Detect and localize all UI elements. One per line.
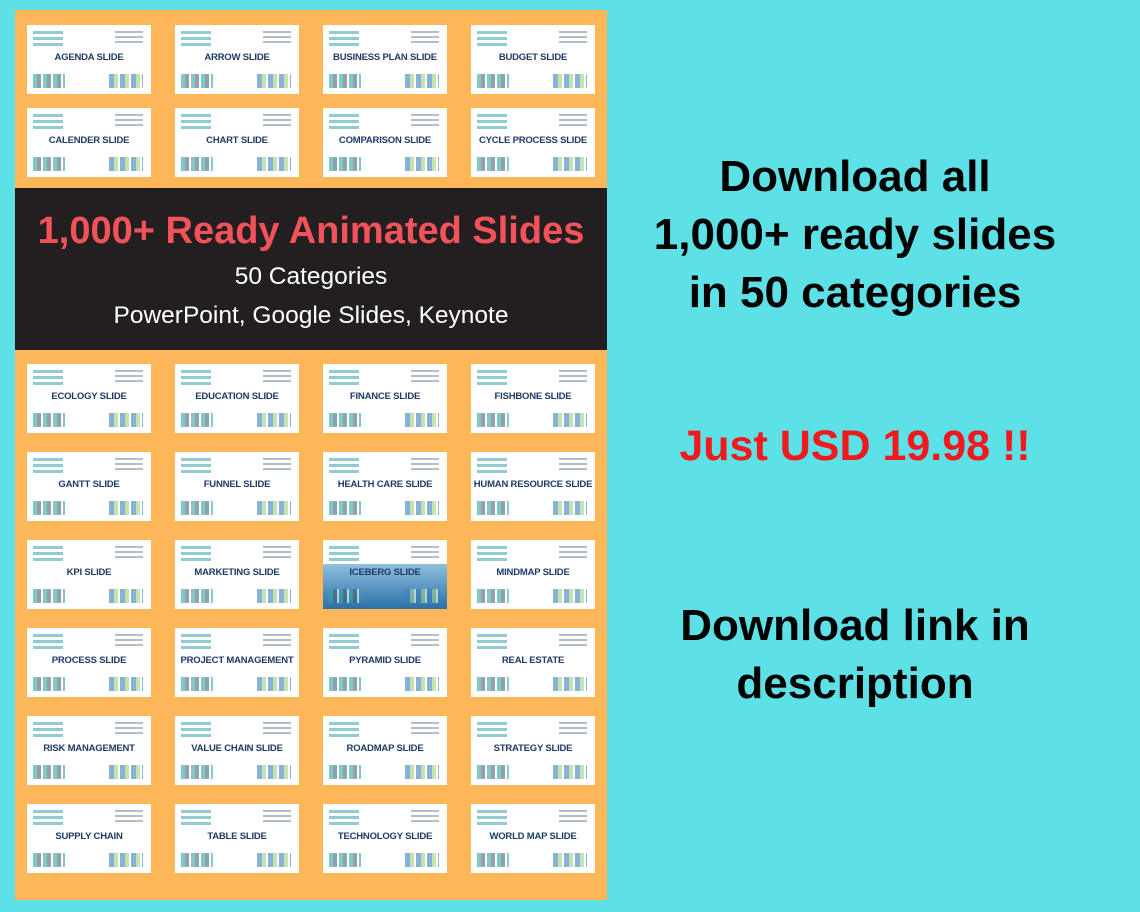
thumbnail: pyramid — [323, 628, 447, 697]
thumbnail: process: PROCESS SLIDE — [52, 655, 126, 666]
thumbnail: iceberg: ICEBERG SLIDE — [349, 567, 421, 578]
thumbnail: calender: CALENDER SLIDE — [49, 135, 129, 146]
thumbnail: calender — [27, 108, 151, 177]
text: download link — [680, 601, 1030, 708]
thumbnail: gantt — [27, 452, 151, 521]
text: price: Just USD 19.98 !! — [679, 422, 1031, 470]
thumbnail: world map: WORLD MAP SLIDE — [489, 831, 577, 842]
thumbnail: risk management — [27, 716, 151, 785]
thumbnail: gantt: GANTT SLIDE — [58, 479, 120, 490]
thumbnail: strategy: STRATEGY SLIDE — [494, 743, 572, 754]
thumbnail: business plan: BUSINESS PLAN SLIDE — [333, 52, 437, 63]
panel: slide catalogue — [15, 10, 607, 900]
thumbnail: arrow — [175, 25, 299, 94]
thumbnail: pyramid: PYRAMID SLIDE — [349, 655, 421, 666]
text: download link: description — [736, 659, 974, 708]
banner subtitle — [114, 263, 508, 329]
thumbnail: marketing — [175, 540, 299, 609]
thumbnail: health care: HEALTH CARE SLIDE — [338, 479, 432, 490]
thumbnail: ecology: ECOLOGY SLIDE — [51, 391, 127, 402]
thumbnail: comparison: COMPARISON SLIDE — [339, 135, 431, 146]
thumbnail: real estate: REAL ESTATE — [502, 655, 564, 666]
banner title: 1,000+ Ready Animated Slides — [38, 210, 584, 252]
thumbnail: human resource: HUMAN RESOURCE SLIDE — [474, 479, 592, 490]
thumbnail: mindmap: MINDMAP SLIDE — [496, 567, 570, 578]
thumbnail: supply chain — [27, 804, 151, 873]
thumbnail: fishbone: FISHBONE SLIDE — [495, 391, 571, 402]
thumbnail: funnel — [175, 452, 299, 521]
thumbnail: education: EDUCATION SLIDE — [195, 391, 279, 402]
thumbnail: chart — [175, 108, 299, 177]
thumbnail: iceberg — [323, 540, 447, 609]
thumbnail: business plan — [323, 25, 447, 94]
thumbnail: health care — [323, 452, 447, 521]
text: download all: in 50 categories — [689, 268, 1021, 317]
thumbnail: project management — [175, 628, 299, 697]
thumbnail: finance: FINANCE SLIDE — [350, 391, 420, 402]
thumbnail: value chain: VALUE CHAIN SLIDE — [191, 743, 283, 754]
thumbnail: risk management: RISK MANAGEMENT — [43, 743, 135, 754]
thumbnail: chart: CHART SLIDE — [206, 135, 268, 146]
thumbnail: world map — [471, 804, 595, 873]
thumbnail: budget — [471, 25, 595, 94]
thumbnail: arrow: ARROW SLIDE — [204, 52, 270, 63]
thumbnail: cycle process: CYCLE PROCESS SLIDE — [479, 135, 587, 146]
thumbnail: finance — [323, 364, 447, 433]
thumbnail: marketing: MARKETING SLIDE — [194, 567, 280, 578]
thumbnail: supply chain: SUPPLY CHAIN — [55, 831, 123, 842]
thumbnail: agenda — [27, 25, 151, 94]
thumbnail: strategy — [471, 716, 595, 785]
text: download link: Download link in — [680, 601, 1030, 650]
thumbnail: fishbone — [471, 364, 595, 433]
thumbnail: table — [175, 804, 299, 873]
banner subtitle: 50 Categories — [235, 263, 387, 290]
thumbnail: table: TABLE SLIDE — [207, 831, 267, 842]
thumbnail: process — [27, 628, 151, 697]
thumbnail: kpi — [27, 540, 151, 609]
thumbnail: human resource — [471, 452, 595, 521]
thumbnail: budget: BUDGET SLIDE — [499, 52, 567, 63]
thumbnail: cycle process — [471, 108, 595, 177]
thumbnail: comparison — [323, 108, 447, 177]
thumbnail: ecology — [27, 364, 151, 433]
thumbnail: agenda: AGENDA SLIDE — [54, 52, 124, 63]
thumbnail: mindmap — [471, 540, 595, 609]
text: download all: 1,000+ ready slides — [654, 210, 1056, 259]
thumbnail: funnel: FUNNEL SLIDE — [204, 479, 270, 490]
text: download all — [654, 152, 1056, 317]
text: download all: Download all — [719, 152, 991, 201]
thumbnail: kpi: KPI SLIDE — [67, 567, 111, 578]
thumbnail: roadmap: ROADMAP SLIDE — [347, 743, 423, 754]
thumbnail: value chain — [175, 716, 299, 785]
banner: headline — [15, 188, 607, 350]
thumbnail: project management: PROJECT MANAGEMENT — [180, 655, 294, 666]
thumbnail: technology: TECHNOLOGY SLIDE — [338, 831, 432, 842]
banner subtitle: PowerPoint, Google Slides, Keynote — [114, 302, 508, 329]
thumbnail: technology — [323, 804, 447, 873]
thumbnail: roadmap — [323, 716, 447, 785]
thumbnail: real estate — [471, 628, 595, 697]
thumbnail: education — [175, 364, 299, 433]
